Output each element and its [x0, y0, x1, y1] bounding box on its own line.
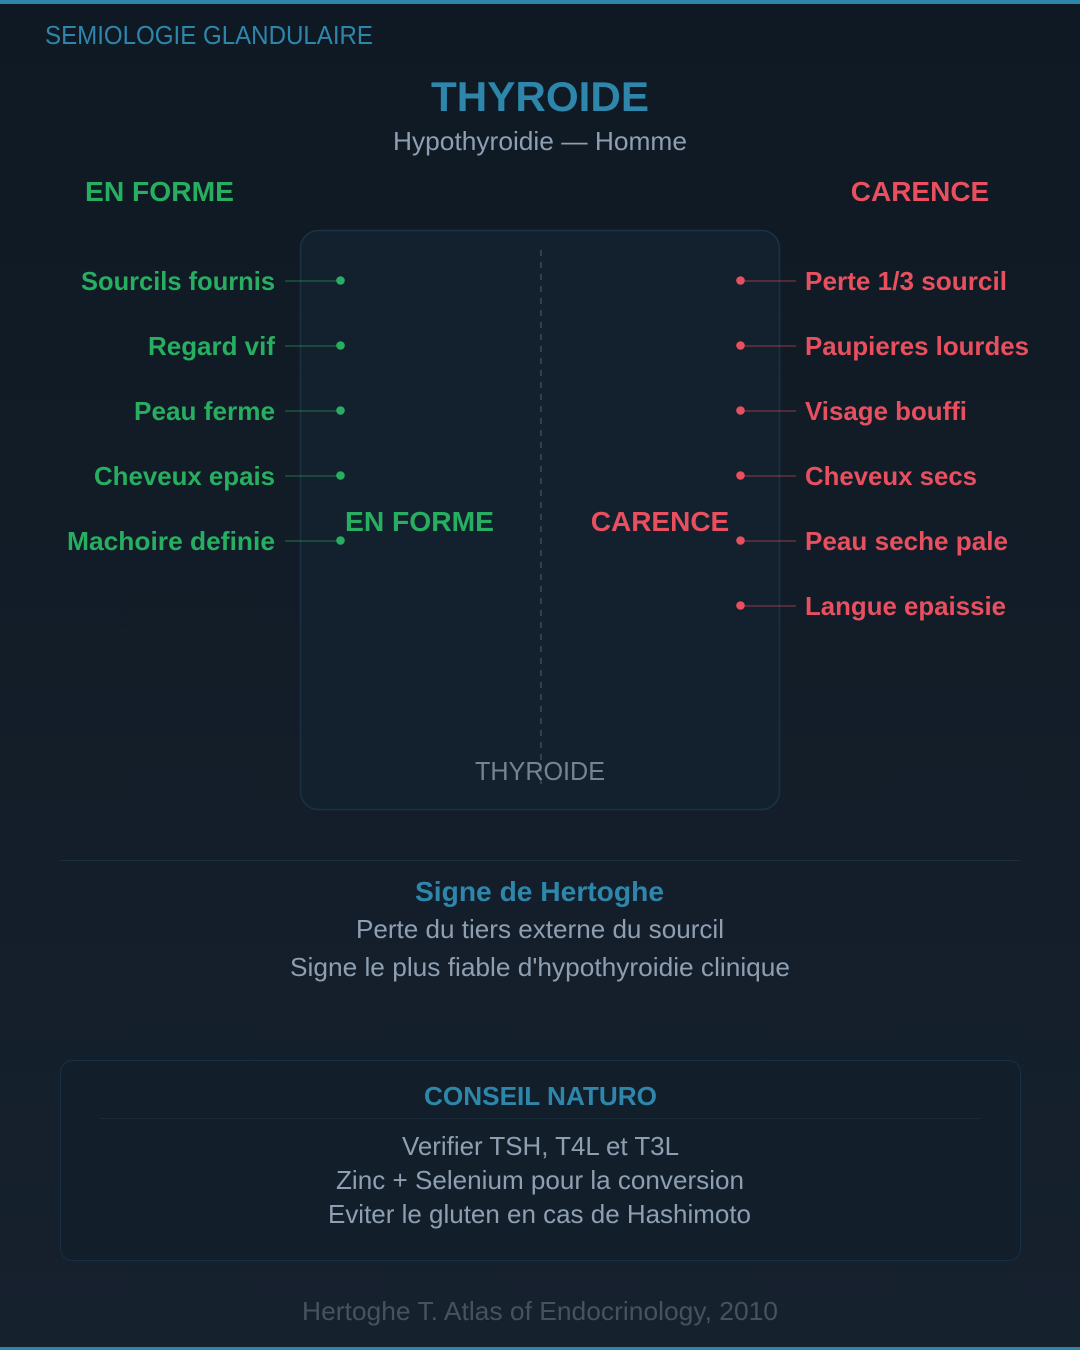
text block: signe de Hertoghe — [290, 876, 790, 982]
sign: regard vif — [148, 331, 345, 361]
subtitle: Hypothyroidie — Homme — [393, 126, 687, 156]
top accent bar — [0, 0, 1080, 4]
sign: cheveux epais: Cheveux epais — [94, 461, 275, 491]
section label: SEMIOLOGIE GLANDULAIRE — [45, 20, 373, 50]
sign: peau ferme: Peau ferme — [134, 396, 275, 426]
sign: machoire definie: Machoire definie — [67, 526, 275, 556]
panel: body comparison — [300, 230, 780, 810]
sign: peau ferme — [134, 396, 345, 426]
conseil line 1: Verifier TSH, T4L et T3L — [402, 1131, 679, 1161]
sign: visage bouffi — [736, 396, 967, 426]
conseil heading: CONSEIL NATURO — [424, 1081, 657, 1111]
Hertoghe line 1: Perte du tiers externe du sourcil — [356, 914, 724, 944]
panel heading: carence: CARENCE — [591, 506, 729, 537]
sign: langue epaissie: Langue epaissie — [805, 591, 1006, 621]
left column heading: EN FORME — [85, 176, 234, 207]
sign: paupieres lourdes: Paupieres lourdes — [805, 331, 1029, 361]
left signs list — [67, 266, 345, 556]
sign: regard vif: Regard vif — [148, 331, 275, 361]
sign: perte 1/3 sourcil: Perte 1/3 sourcil — [805, 266, 1007, 296]
bottom accent bar — [0, 1347, 1080, 1350]
conseil line 3: Eviter le gluten en cas de Hashimoto — [328, 1199, 751, 1229]
sign: sourcils fournis: Sourcils fournis — [81, 266, 275, 296]
panel caption: THYROIDE — [475, 756, 605, 786]
sign: cheveux secs: Cheveux secs — [805, 461, 977, 491]
source citation: Hertoghe T. Atlas of Endocrinology, 2010 — [302, 1296, 778, 1326]
conseil line 2: Zinc + Selenium pour la conversion — [336, 1165, 744, 1195]
sign: peau seche pale: Peau seche pale — [805, 526, 1008, 556]
panel: conseil naturo — [60, 1060, 1020, 1260]
sign: visage bouffi: Visage bouffi — [805, 396, 967, 426]
title: THYROIDE — [431, 73, 649, 120]
Hertoghe heading: Signe de Hertoghe — [415, 876, 664, 907]
right column heading: CARENCE — [851, 176, 989, 207]
right signs list — [736, 266, 1029, 621]
panel heading: en forme: EN FORME — [345, 506, 494, 537]
Hertoghe line 2: Signe le plus fiable d'hypothyroidie clinique — [290, 952, 790, 982]
